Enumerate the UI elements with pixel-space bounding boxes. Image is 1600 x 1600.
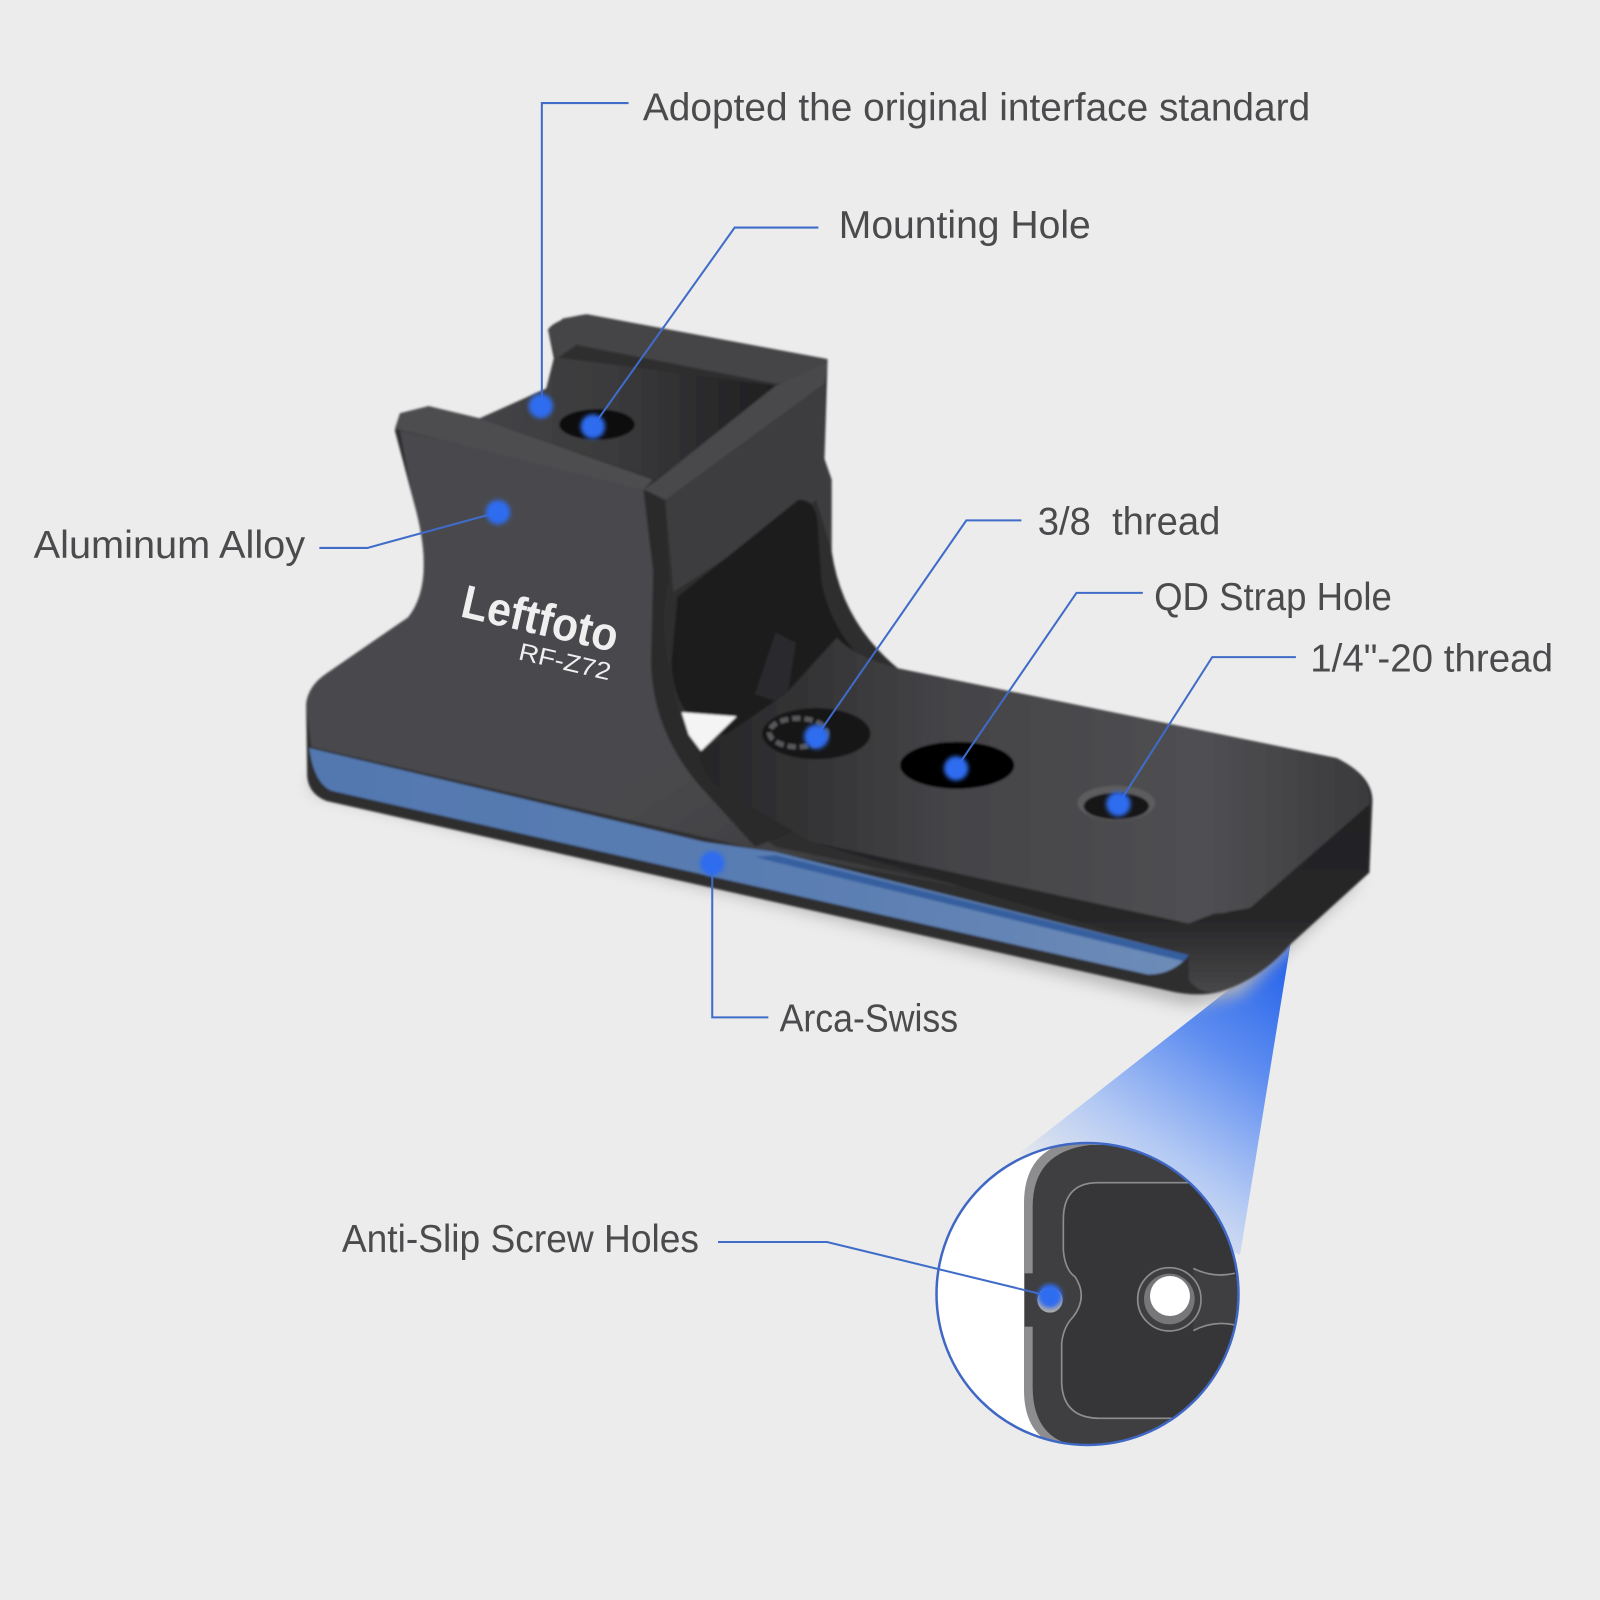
- label: mounting hole: Mounting Hole: [839, 204, 1091, 247]
- label: arca-swiss: Arca-Swiss: [780, 998, 958, 1041]
- label: 1/4 thread: 1/4"-20 thread: [1310, 637, 1553, 680]
- label: aluminum alloy: Aluminum Alloy: [34, 524, 306, 567]
- callout dots: [486, 394, 1131, 876]
- blue Arca-Swiss strip: [309, 748, 1189, 974]
- label: interface standard: Adopted the original interface standard: [643, 86, 1310, 129]
- inner block: [673, 633, 796, 704]
- label: QD strap hole: QD Strap Hole: [1154, 576, 1392, 619]
- boss grooves: [1193, 1268, 1235, 1331]
- right wall: [665, 384, 832, 592]
- plate edge: [1024, 1144, 1102, 1442]
- drop shadow: [311, 765, 1362, 1005]
- top front rim: [395, 406, 653, 490]
- leader: anti-slip: [718, 1242, 1049, 1296]
- plate underside: [1032, 1145, 1187, 1444]
- arch post: [645, 490, 806, 847]
- top floor and recess: [480, 357, 776, 480]
- arch window: [671, 500, 867, 735]
- strip groove: [755, 855, 1189, 961]
- centre hole opening: [1150, 1276, 1190, 1316]
- recess: [1060, 1182, 1236, 1420]
- centre boss: [1194, 1270, 1237, 1330]
- leader lines: [319, 103, 1296, 1017]
- inset white disc: [936, 1143, 1238, 1445]
- centre hole ring: [1138, 1268, 1201, 1331]
- brand name: Leftfoto: [457, 575, 624, 662]
- magnifier beam: [1020, 941, 1291, 1255]
- 1/4 thread hole: [1078, 786, 1155, 820]
- label: anti-slip screw holes: Anti-Slip Screw Holes: [342, 1218, 699, 1261]
- screw notch: [1024, 1273, 1033, 1327]
- white gap: [682, 712, 737, 751]
- product photo: lens foot: [34, 86, 1553, 1261]
- model name: RF-Z72: [516, 639, 614, 686]
- inset outline: [936, 1143, 1238, 1445]
- foot silhouette: [306, 314, 1372, 994]
- anti-slip screw hole: [1037, 1287, 1063, 1313]
- foot body: [306, 314, 1372, 994]
- 3/8 thread hole: [762, 708, 870, 759]
- plate top surface: [699, 638, 1370, 923]
- QD strap hole: [900, 742, 1014, 789]
- anti-slip dot: [1038, 1284, 1062, 1308]
- label: 3/8 thread: 3/8 thread: [1038, 501, 1220, 544]
- mounting hole: [559, 409, 635, 440]
- right bevel: [643, 362, 828, 500]
- inset contents: [1024, 1144, 1238, 1444]
- magnified inset: underside of plate: [718, 1140, 1267, 1450]
- logo: [457, 575, 624, 686]
- centre hole thread: [1144, 1274, 1195, 1324]
- back rail: [548, 314, 828, 384]
- plate edge front: [811, 804, 1369, 992]
- front face: [306, 431, 1020, 898]
